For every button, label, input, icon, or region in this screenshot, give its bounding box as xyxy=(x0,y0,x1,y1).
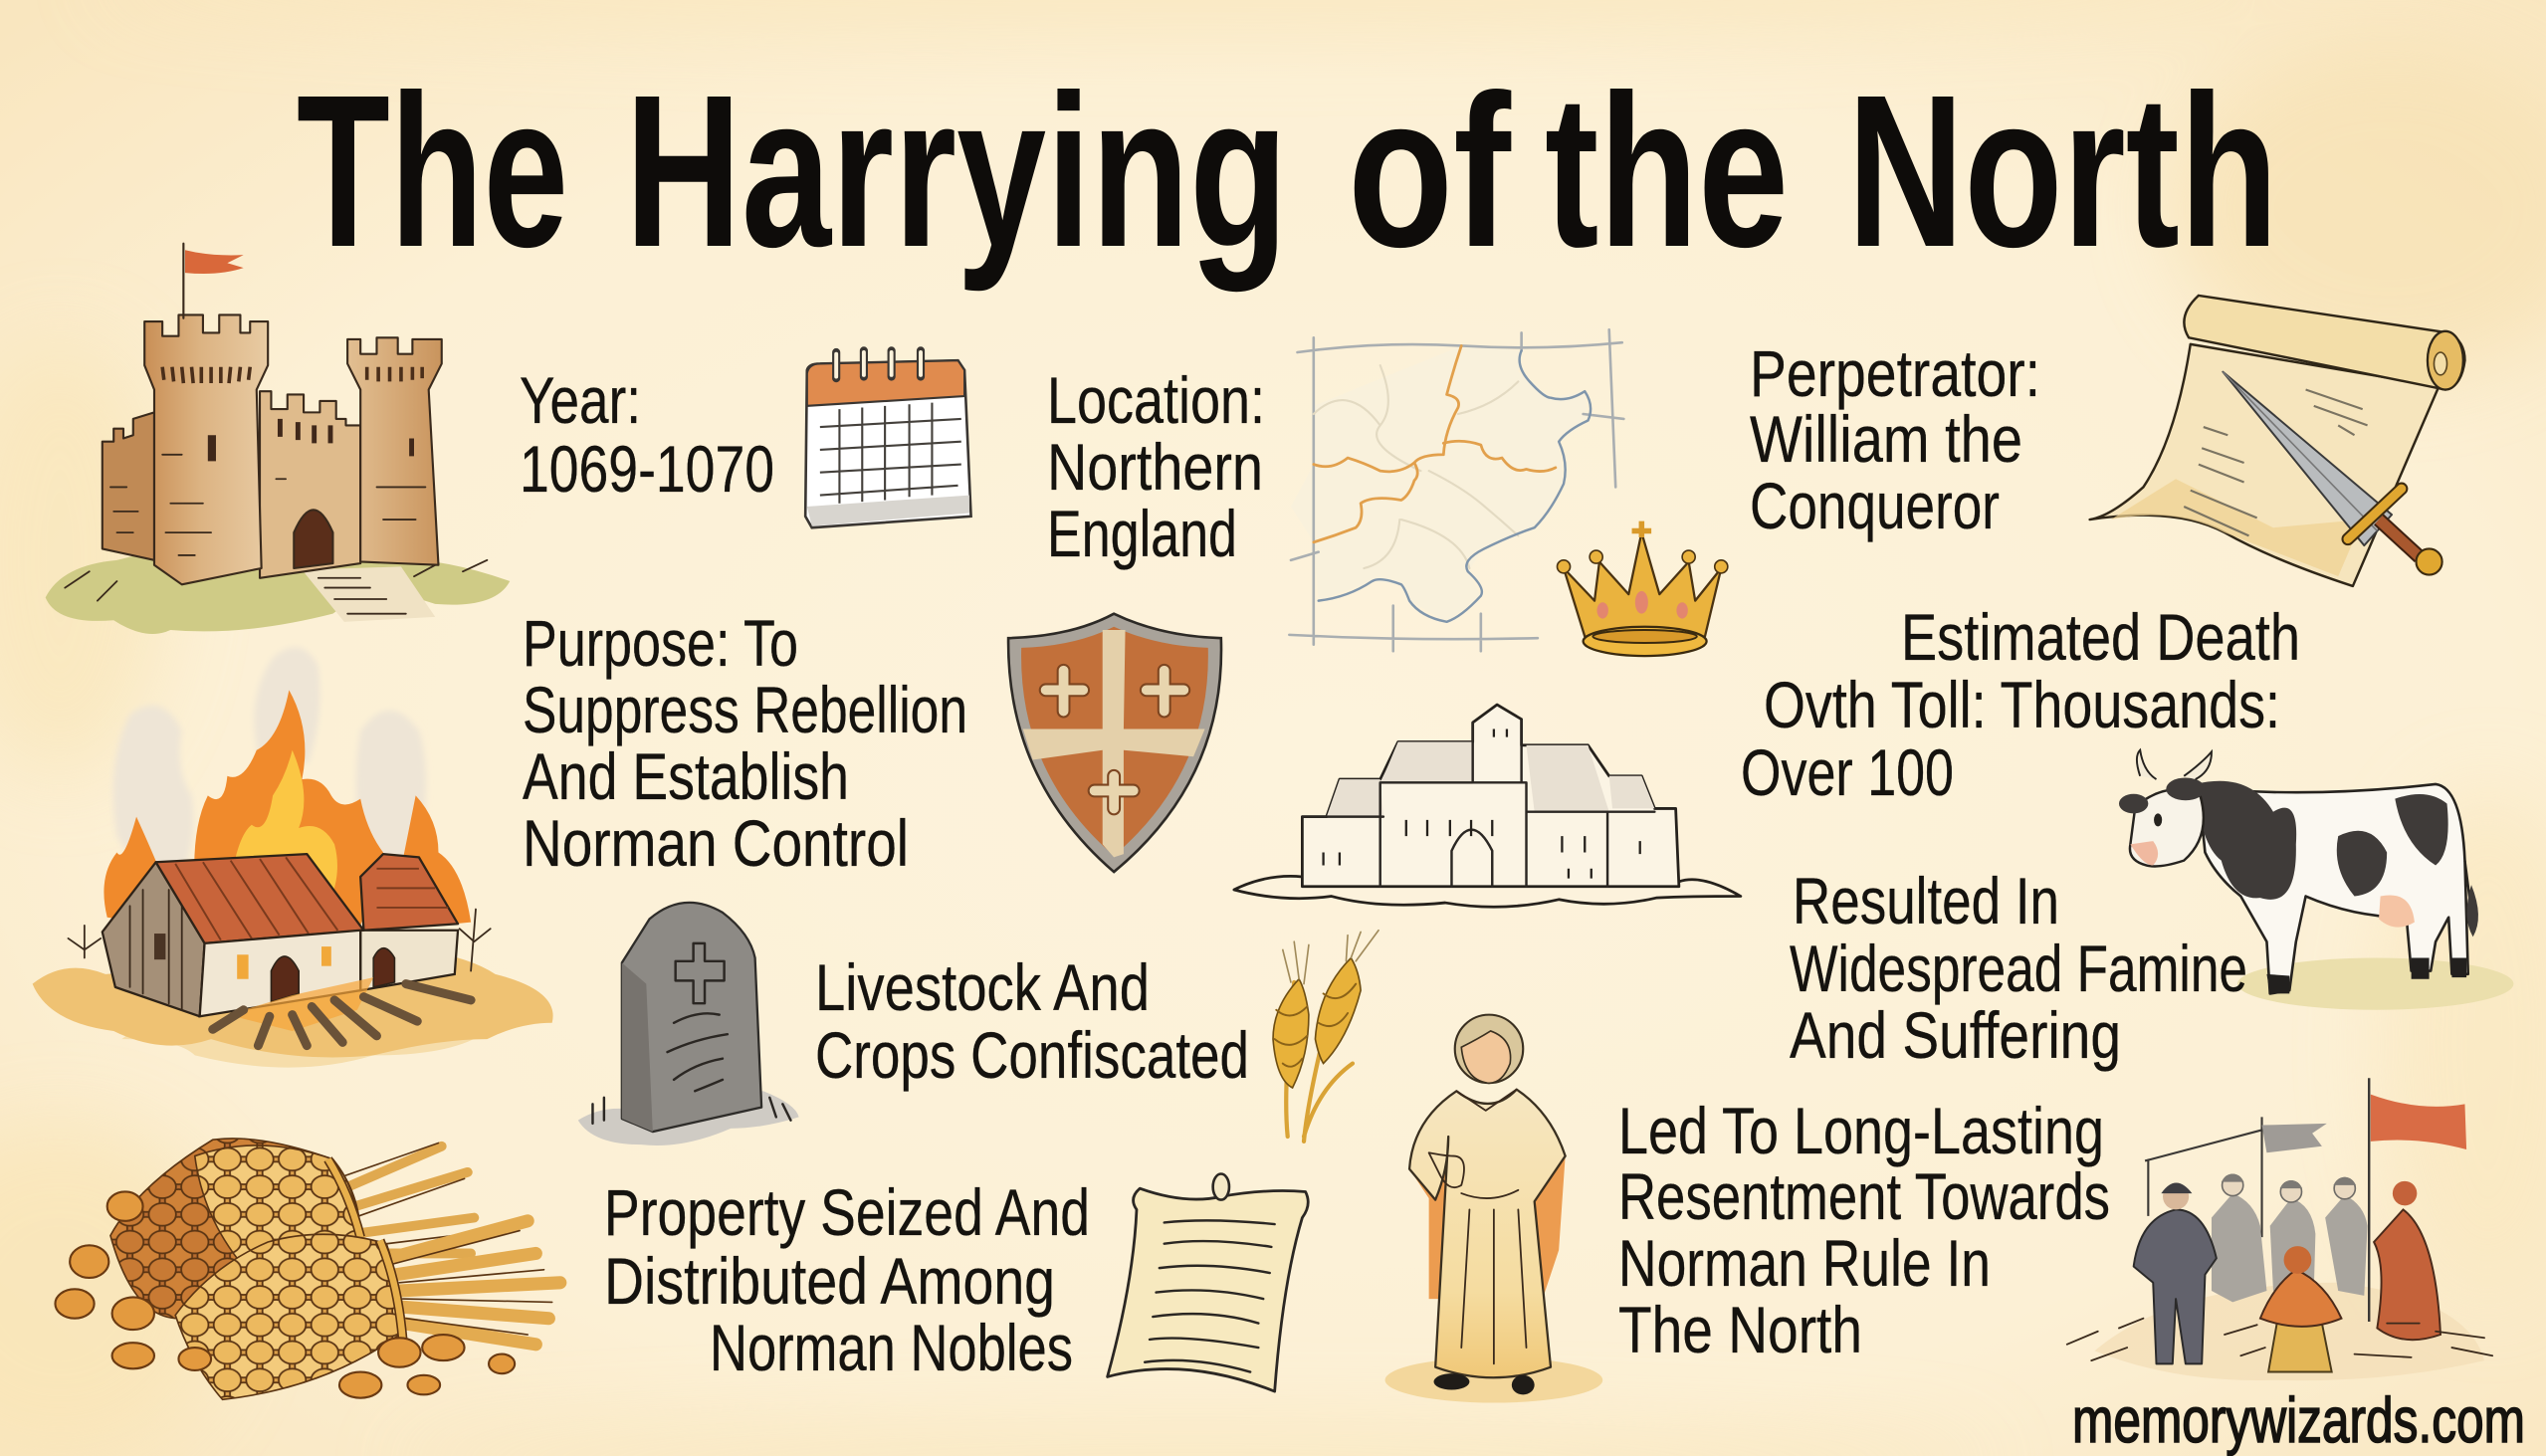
text: perpetrator: Conqueror xyxy=(1750,469,2000,542)
icon: burning house xyxy=(33,647,553,1068)
text: resentment: Resentment Towards xyxy=(1618,1159,2110,1233)
text: death toll: Over 100 xyxy=(1741,735,1954,809)
icon: crown xyxy=(1558,521,1728,656)
icon: monk xyxy=(1385,1015,1602,1403)
text: year xyxy=(520,363,774,506)
title xyxy=(297,51,2278,293)
text: livestock xyxy=(815,950,1249,1092)
icon: shield xyxy=(1008,614,1221,872)
icon: gravestone xyxy=(578,903,799,1145)
text: famine xyxy=(1790,864,2247,1072)
text: death toll: Ovth Toll: Thousands: xyxy=(1764,668,2280,741)
text: year: 1069-1070 xyxy=(520,432,774,506)
text: livestock: Livestock And xyxy=(815,950,1150,1024)
text: famine: And Suffering xyxy=(1790,998,2121,1072)
text: property: Norman Nobles xyxy=(710,1311,1073,1384)
text: purpose xyxy=(523,606,967,880)
text: property: Property Seized And xyxy=(604,1175,1090,1249)
text: famine: Widespread Famine xyxy=(1790,932,2247,1005)
text: location xyxy=(1047,363,1265,570)
icon: castle xyxy=(46,244,510,634)
text: death toll: Estimated Death xyxy=(1901,600,2300,674)
title: of xyxy=(1348,51,1512,293)
icon: wheat sheaves and grain xyxy=(55,1139,560,1399)
text: location: England xyxy=(1047,497,1237,570)
text: death toll xyxy=(1741,600,2300,809)
icon: crowd with banners xyxy=(2067,1078,2492,1380)
icon: decree notice xyxy=(1108,1174,1308,1391)
title: Harrying xyxy=(625,51,1288,293)
icon: calendar xyxy=(805,350,971,527)
text: property xyxy=(604,1175,1090,1384)
text: famine: Resulted In xyxy=(1793,864,2059,937)
title: the xyxy=(1545,51,1789,293)
text: perpetrator: Perpetrator: xyxy=(1750,336,2040,410)
icon: monastery xyxy=(1234,705,1741,907)
text: perpetrator: William the xyxy=(1750,402,2022,476)
text: purpose: Suppress Rebellion xyxy=(523,673,967,746)
text: perpetrator xyxy=(1750,336,2040,542)
icon: cow xyxy=(2119,750,2513,1010)
title: North xyxy=(1847,51,2278,293)
text: location: Northern xyxy=(1047,430,1263,504)
map of northern england xyxy=(1289,329,1623,651)
text: purpose: And Establish xyxy=(523,739,849,813)
title: The xyxy=(297,51,568,293)
icon: wheat xyxy=(1273,931,1379,1142)
text: resentment: The North xyxy=(1618,1293,1862,1366)
text: resentment: Led To Long-Lasting xyxy=(1618,1094,2104,1167)
text: resentment xyxy=(1618,1094,2110,1366)
text: livestock: Crops Confiscated xyxy=(815,1018,1249,1092)
icon: scroll and sword xyxy=(2090,296,2464,586)
text: resentment: Norman Rule In xyxy=(1618,1226,1991,1300)
text: purpose: Purpose: To xyxy=(523,606,798,680)
text: purpose: Norman Control xyxy=(523,806,909,880)
text: property: Distributed Among xyxy=(604,1244,1055,1318)
text: location: Location: xyxy=(1047,363,1265,437)
text: year: Year: xyxy=(520,363,641,437)
